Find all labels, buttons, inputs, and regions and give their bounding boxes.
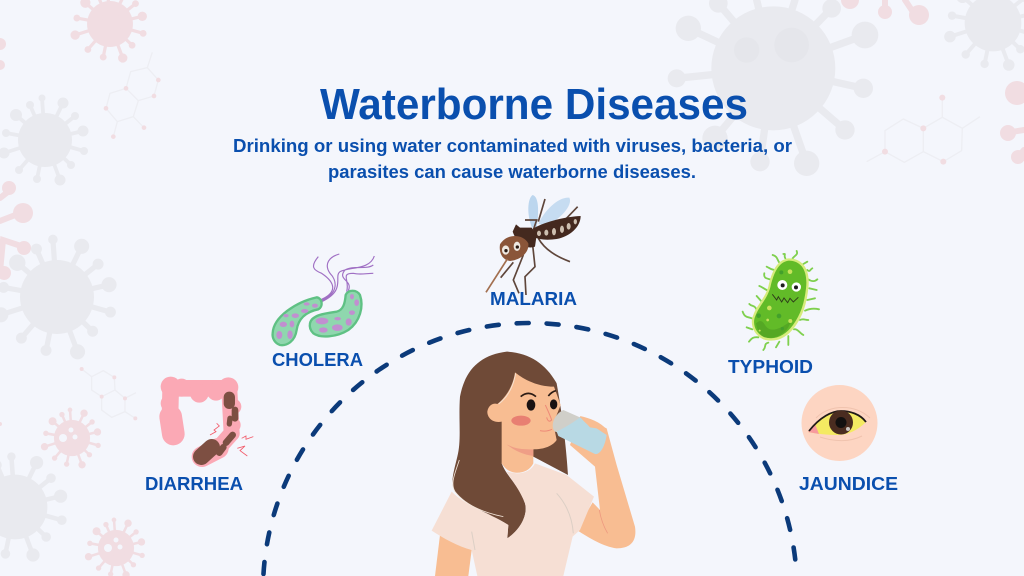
eye white [808,411,866,435]
background: molecule top right [867,95,980,165]
icon: cholera bacteria [273,254,374,345]
iris [829,410,853,434]
legs [501,199,578,295]
bacterium left [273,297,322,345]
skin circle [802,385,878,461]
icon: jaundiced eye [802,385,878,461]
neck shadow [507,444,533,456]
subtitle: parasites can cause waterborne diseases. [328,162,696,182]
eyes [502,245,509,255]
icon: mosquito [486,195,581,295]
arm right [570,417,635,548]
illustration: woman drinking water [432,352,635,576]
icon: typhoid bacterium [743,251,819,350]
eyes and cheek [511,416,531,426]
flagella [313,254,374,302]
thorax [513,224,537,248]
bacterium right [310,291,361,336]
body [752,258,809,341]
face [487,372,561,473]
hair back [452,352,568,538]
title: Waterborne Diseases [320,80,748,129]
hair strands [453,373,516,517]
label: diarrhea: DIARRHEA [145,474,243,494]
subtitle: Drinking or using water contaminated with viruses, bacteria, or [233,136,792,156]
background: molecule top left [104,52,161,139]
icon: colon [161,377,253,457]
fingers [580,416,607,430]
dashed arc [263,323,797,574]
label: typhoid: TYPHOID [728,357,813,377]
pain marks [210,423,253,456]
label: malaria: MALARIA [490,289,577,309]
glass [553,410,580,435]
wings [528,195,538,228]
shirt [432,463,594,576]
cilia [743,251,819,350]
stool [201,397,235,457]
arm left [435,535,472,576]
colon body [170,388,232,457]
abdomen [533,216,581,240]
label: jaundice: JAUNDICE [799,474,898,494]
creases [816,408,870,441]
spots [276,294,359,339]
head [500,236,528,261]
proboscis [486,259,507,292]
background: molecule lower left [80,367,137,420]
label: cholera: CHOLERA [272,350,363,370]
face [777,280,787,290]
subtitle [233,136,792,182]
